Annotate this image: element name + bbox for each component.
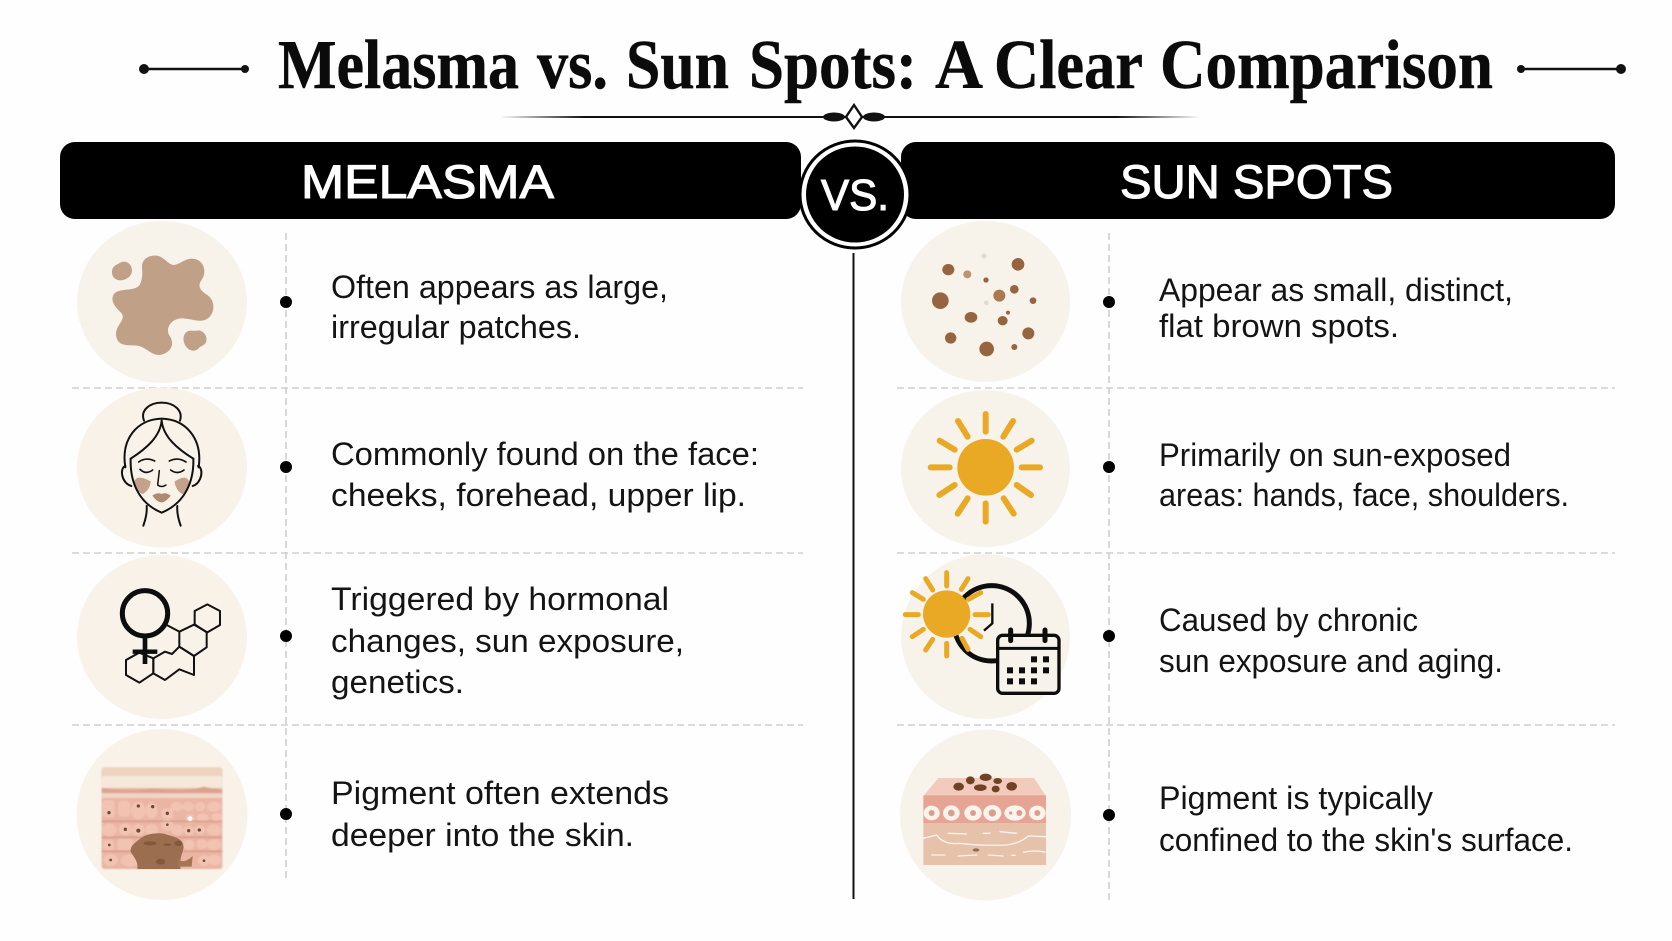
title: vs. (537, 27, 608, 104)
text: sun-exposed areas: Primarily on sun-exposed (1159, 437, 1511, 473)
text: surface pigment (1159, 780, 1573, 858)
title: Clear (994, 27, 1143, 104)
bullet dot (1103, 809, 1115, 821)
text: spots: flat brown spots. (1159, 308, 1399, 344)
panel: melasma column (60, 142, 803, 900)
sun spots header bar (901, 142, 1615, 219)
bullet dot (1103, 296, 1115, 308)
title: Spots: (749, 27, 917, 104)
title: Melasma (278, 27, 519, 104)
icon: sun (901, 390, 1070, 547)
title: Comparison (1160, 27, 1493, 104)
text: location on face (331, 436, 759, 513)
text: patches (331, 269, 668, 345)
bullet dot (280, 461, 292, 473)
icon: irregular patches (77, 221, 247, 383)
text: triggers: genetics. (331, 664, 464, 700)
bullet dot (1103, 630, 1115, 642)
column guide line (1108, 233, 1110, 900)
text: triggers: changes, sun exposure, (331, 623, 684, 659)
icon: sun, clock and calendar (901, 554, 1070, 719)
title (278, 27, 1493, 104)
text: location on face: Commonly found on the face: (331, 436, 759, 472)
text: sun-exposed areas: areas: hands, face, shoulders. (1159, 477, 1569, 513)
text: causes: Caused by chronic (1159, 602, 1418, 638)
vs badge (800, 141, 910, 248)
text: causes (1159, 602, 1503, 679)
vs badge: VS. (821, 171, 889, 220)
icon: deep skin cross-section (76, 729, 248, 900)
text: patches: irregular patches. (331, 309, 581, 345)
title ornament: right (1517, 64, 1626, 74)
bullet dot (280, 296, 292, 308)
icon: surface skin cross-section (900, 730, 1071, 900)
text: triggers (331, 581, 684, 700)
text: patches: Often appears as large, (331, 269, 668, 305)
text: spots: Appear as small, distinct, (1159, 272, 1513, 308)
text: spots (1159, 272, 1513, 344)
title flourish divider (500, 105, 1200, 128)
title ornament: left (139, 64, 249, 74)
icon: female symbol and hormone molecule (77, 555, 247, 719)
melasma header bar: MELASMA (301, 155, 555, 208)
title: Sun (626, 27, 729, 104)
icon: face with cheek pigment (77, 388, 247, 548)
panel: sun spots column (897, 142, 1615, 900)
bullet dot (280, 630, 292, 642)
bullet dot (1103, 461, 1115, 473)
text: deep pigment: deeper into the skin. (331, 817, 634, 853)
text: triggers: Triggered by hormonal (331, 581, 669, 617)
text: deep pigment: Pigment often extends (331, 775, 669, 811)
text: surface pigment: Pigment is typically (1159, 780, 1433, 816)
text: surface pigment: confined to the skin's surface. (1159, 822, 1573, 858)
text: causes: sun exposure and aging. (1159, 643, 1503, 679)
central vertical divider (852, 253, 854, 899)
icon: scattered brown spots (901, 221, 1070, 382)
text: location on face: cheeks, forehead, upper lip. (331, 477, 746, 513)
text: deep pigment (331, 775, 669, 853)
bullet dot (280, 808, 292, 820)
text: sun-exposed areas (1159, 437, 1569, 513)
melasma header bar (60, 142, 801, 219)
sun spots header bar: SUN SPOTS (1120, 155, 1393, 208)
title: A (935, 27, 983, 104)
column guide line (285, 233, 287, 880)
